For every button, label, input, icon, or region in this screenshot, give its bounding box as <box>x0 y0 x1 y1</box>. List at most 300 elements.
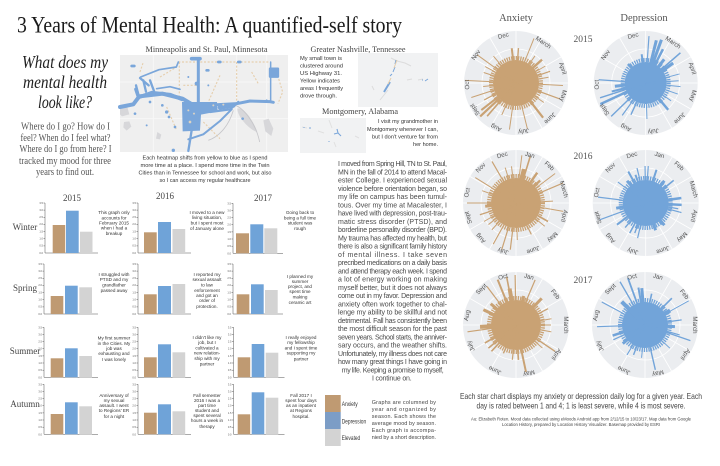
bar chart: Winter 2015: 1.0 <box>39 236 44 240</box>
star chart: Depression 2016: Aug <box>604 231 617 244</box>
note: Spring 2017: spent time <box>289 289 311 294</box>
note: Autumn 2016: 2016 I was a <box>194 398 220 403</box>
bar chart: Summer 2015: 3.5 <box>38 325 43 329</box>
star chart: Anxiety 2016: Nov <box>475 161 488 174</box>
note: Winter 2016: but I spent most <box>191 220 224 225</box>
bar chart: Summer 2017: 0.0 <box>228 375 232 379</box>
star chart: Depression 2015: March <box>664 35 682 51</box>
heading: Montgomery map: Montgomery, Alabama <box>322 107 398 116</box>
bar chart: Autumn 2016: 1.5 <box>132 411 137 415</box>
personal story paragraph: sary occurs, and the weather shifts. <box>338 343 447 350</box>
legend <box>325 395 366 446</box>
bar chart: Winter 2017: 3.0 <box>227 208 232 212</box>
question heading: What does my <box>22 52 108 72</box>
star chart: Depression 2016: Nov <box>604 161 618 174</box>
bar chart: Autumn 2015: 2.5 <box>38 396 43 400</box>
Nashville text: clustered around <box>300 64 343 70</box>
note: Autumn 2017: as an inpatient <box>286 403 317 408</box>
bar chart: Autumn 2017: 0.0 <box>228 432 232 436</box>
note: Autumn 2016: spent several <box>193 413 221 418</box>
bar chart: Winter 2017: 0.5 <box>227 244 232 248</box>
note: Autumn 2017: spent four days <box>285 398 317 403</box>
star chart: Depression 2015: Dec <box>627 31 639 41</box>
star chart: Anxiety 2017: Feb <box>549 288 561 301</box>
note: Spring 2016: sexual assault <box>192 277 222 282</box>
note: Autumn 2015: my sexual <box>104 398 124 403</box>
note: Spring 2015: passed away <box>101 288 128 293</box>
note: Winter 2017: student was <box>288 220 313 225</box>
bar chart: Winter 2015: 2.0 <box>39 222 44 226</box>
bar chart: Summer 2015: 2.0 <box>38 346 43 350</box>
star chart: Depression 2016: March <box>688 180 699 199</box>
personal story paragraph: Unfortunately, my illness does not care <box>338 351 447 358</box>
star chart: Anxiety 2016 <box>463 150 569 256</box>
star chart: Depression 2016: Sept <box>593 210 604 225</box>
star chart: Depression 2017: April <box>679 347 692 361</box>
legend: Depression <box>342 420 366 426</box>
credits: Location History, prepared by Location History Visualizer. Basemap provided by ESRI <box>502 422 660 428</box>
legend explanation: season. Each shows the <box>372 414 436 420</box>
personal story paragraph: precribed medications on a daily basis <box>338 260 448 267</box>
note: Winter 2016: I moved to a new <box>190 210 225 215</box>
bar chart: Autumn 2015: 0.5 <box>38 425 43 429</box>
star chart: Depression 2017: Feb <box>678 288 690 301</box>
bar chart: Spring 2016: 2.5 <box>132 276 137 280</box>
bar chart: Summer 2016: 3.5 <box>132 325 137 329</box>
star chart heading: Depression: Depression <box>620 13 668 24</box>
bar chart: Summer 2017: 3.5 <box>228 325 232 329</box>
star chart: Anxiety 2017: June <box>487 364 503 376</box>
note: Spring 2015: grandfather <box>102 282 126 287</box>
bar chart: Summer 2017: 3.0 <box>228 332 232 336</box>
bar chart: Autumn 2015: 3.0 <box>38 389 43 393</box>
Montgomery text: but I don't venture far from <box>372 134 438 140</box>
note: Spring 2017: project, and <box>288 284 312 289</box>
personal story paragraph: a lot of energy working on making <box>338 277 447 284</box>
bar chart: Summer 2016: 0.0 <box>132 375 137 379</box>
bar chart: Spring 2017: 3.0 <box>227 269 232 273</box>
bar chart: Summer 2016: 2.0 <box>132 346 137 350</box>
season row labels: Autumn <box>10 399 40 409</box>
personal story paragraph: I moved from Spring Hill, TN to St. Paul, <box>338 161 447 168</box>
legend explanation: nied by a short description. <box>372 435 436 441</box>
bar chart: Spring 2015: 1.5 <box>38 290 43 294</box>
star chart: Depression 2016: May <box>675 230 688 244</box>
star chart: Depression 2016: Dec <box>626 151 638 160</box>
heading: Minneapolis map: Minneapolis and St. Paul, Minnesota <box>146 45 268 54</box>
star chart: Anxiety 2015: Aug <box>489 122 503 133</box>
bar chart: Autumn 2016: 3.5 <box>132 382 137 386</box>
star chart: Anxiety 2015: Nov <box>470 48 483 62</box>
bar chart: Spring 2016: 3.5 <box>132 262 137 266</box>
bar chart: Winter 2016: 2.0 <box>132 222 137 226</box>
bar chart: Winter 2015: 2.5 <box>39 215 44 219</box>
bar chart: Autumn 2016: 0.5 <box>132 425 137 429</box>
bar chart: Summer 2015: 0.0 <box>38 375 43 379</box>
bar chart: Spring 2016: 2.0 <box>132 283 137 287</box>
personal story paragraph: anxiety often work together to chal- <box>338 301 448 308</box>
note: Spring 2016: and got an <box>196 293 218 298</box>
bar chart: Summer 2015: 1.5 <box>38 354 43 358</box>
bar chart: Winter 2015: 1.5 <box>39 230 44 234</box>
star chart: Depression 2015: Aug <box>619 122 632 133</box>
bar chart: Spring 2016 <box>132 262 191 316</box>
note: Autumn 2016: hours a week in <box>191 418 224 423</box>
star chart: Anxiety 2016: March <box>558 180 569 199</box>
star chart: Depression 2015: June <box>672 111 687 125</box>
note: Spring 2015: PTSD and my <box>100 277 129 282</box>
star chart: Depression 2015: July <box>646 127 659 135</box>
map: Minneapolis and St. Paul heatmap <box>120 55 288 152</box>
star chart: Depression 2016: June <box>655 244 670 255</box>
bar chart: Spring 2015: 1.0 <box>38 298 43 302</box>
star chart: Depression 2015: May <box>687 89 697 103</box>
intro text: Where do I go? How do I <box>21 122 110 132</box>
note: Summer 2017: my fellowship <box>287 340 315 345</box>
star chart: Anxiety 2017: Jan <box>523 273 535 282</box>
note: Winter 2017: being a full time <box>284 215 317 220</box>
star chart: Anxiety 2016: Dec <box>496 151 509 160</box>
star chart: Depression 2017 <box>592 272 698 378</box>
intro text: tracked my mood for three <box>19 156 111 167</box>
note: Winter 2015: when I had a <box>101 226 128 230</box>
note: Spring 2017: summer <box>292 279 309 284</box>
bar chart: Winter 2015: 3.0 <box>39 208 44 212</box>
personal story paragraph: lenge my ability to be skillful and not <box>338 310 447 317</box>
bar chart: Autumn 2016: 2.0 <box>132 403 137 407</box>
star chart: Anxiety 2015 <box>464 31 568 135</box>
legend explanation: Each graph is accompa- <box>372 428 436 434</box>
personal story paragraph: my life. Keeping a promise to myself, <box>342 368 444 374</box>
bar chart: Summer 2016 <box>132 325 191 379</box>
star chart: Depression 2016: Oct <box>593 187 602 198</box>
personal story paragraph: tous. Over my time at Macalester, I <box>338 202 447 209</box>
bar chart column headers: 2017 <box>254 193 272 203</box>
star chart: Anxiety 2017 <box>463 272 569 378</box>
bar chart: Spring 2017: 2.0 <box>227 283 232 287</box>
bar chart: Spring 2017: 0.0 <box>227 312 232 316</box>
legend: Elevated <box>342 436 360 442</box>
Montgomery text: Montgomery whenever I can, <box>367 127 438 133</box>
star chart: Anxiety 2017: Oct <box>498 272 509 282</box>
heading: Nashville map: Greater Nashville, Tennessee <box>310 45 406 54</box>
legend: Anxiety <box>342 402 358 408</box>
star chart: Anxiety 2016: June <box>525 244 540 255</box>
star chart: Anxiety 2016: May <box>545 230 559 244</box>
bar chart: Summer 2015: 0.5 <box>38 368 43 372</box>
title: 3 Years of Mental Health: A quantified-self story <box>17 12 402 38</box>
bar chart: Winter 2017: 1.5 <box>227 230 232 234</box>
star chart: Depression 2017: Jan <box>652 273 664 282</box>
bar chart: Autumn 2017 <box>228 382 284 436</box>
Nashville text: Yellow indicates <box>300 78 340 84</box>
personal story paragraph: how many great things I have going in <box>338 359 447 366</box>
note: Spring 2015: I struggled with <box>99 272 130 277</box>
bar chart: Spring 2015: 2.5 <box>38 276 43 280</box>
note: Autumn 2016: Fall semester <box>193 393 221 398</box>
star chart: Anxiety 2016: July <box>496 246 509 256</box>
Montgomery text: I visit my grandmother in <box>378 119 438 125</box>
note: Spring 2017: making <box>293 294 308 300</box>
bar chart: Spring 2015: 2.0 <box>38 283 43 287</box>
star chart: Depression 2016 <box>593 150 699 256</box>
note: Summer 2017: partner <box>294 357 309 362</box>
year label 2015: 2015 <box>574 35 593 45</box>
note: Summer 2017: and I spent time <box>285 345 318 350</box>
note: Autumn 2016: therapy <box>199 424 215 429</box>
personal story paragraph: the most difficult season for the past <box>338 326 447 333</box>
intro text: years to find out. <box>36 167 94 178</box>
star chart: Anxiety 2015: Oct <box>464 79 471 90</box>
bar chart: Winter 2016 <box>132 201 191 255</box>
star chart: Depression 2015: Sept <box>598 102 611 117</box>
legend explanation: Graphs are columned by <box>372 400 436 406</box>
Nashville text: areas I frequently <box>300 86 343 92</box>
note: Autumn 2017: Fall 2017 I <box>290 393 312 398</box>
note: Autumn 2017: at Regions <box>290 408 313 413</box>
bar chart: Spring 2017: 3.5 <box>227 262 232 266</box>
star chart: Depression 2017: July <box>594 339 606 352</box>
bar chart: Summer 2015: 3.0 <box>38 332 43 336</box>
bar chart: Autumn 2017: 1.5 <box>228 411 232 415</box>
star chart: Depression 2016: April <box>689 209 698 223</box>
bar chart: Autumn 2017: 2.0 <box>228 403 232 407</box>
bar chart: Summer 2015 <box>38 325 98 379</box>
bar chart: Autumn 2016: 2.5 <box>132 396 137 400</box>
bar chart: Autumn 2017: 3.0 <box>228 389 232 393</box>
Nashville text: US Highway 31. <box>300 71 342 77</box>
bar chart: Winter 2017: 0.0 <box>227 251 232 255</box>
legend explanation: year and organized by <box>372 407 436 413</box>
star chart: Depression 2016: July <box>626 246 639 256</box>
personal story paragraph: of mental illness. I take seven <box>338 252 447 259</box>
bar chart: Autumn 2016: 3.0 <box>132 389 137 393</box>
note: Summer 2017: supporting my <box>287 351 316 356</box>
bar chart: Summer 2016: 1.0 <box>132 361 137 365</box>
star chart: Anxiety 2017: Aug <box>463 309 472 322</box>
bar chart: Autumn 2016: 0.0 <box>132 432 137 436</box>
bar chart: Autumn 2015: 1.5 <box>38 411 43 415</box>
map: Montgomery heatmap <box>300 118 366 153</box>
personal story paragraph: there is also a significant family history <box>338 244 448 251</box>
map caption: so I can access my regular healthcare <box>160 178 250 184</box>
bar chart: Spring 2015: 3.0 <box>38 269 43 273</box>
bar chart: Spring 2017: 1.5 <box>227 290 232 294</box>
bar chart: Spring 2017: 1.0 <box>227 298 232 302</box>
bar chart: Summer 2017: 0.5 <box>228 368 232 372</box>
bar chart: Spring 2017 <box>227 262 283 316</box>
star chart: Depression 2016: Feb <box>673 160 686 173</box>
bar chart: Winter 2015: 3.5 <box>39 201 44 205</box>
bar chart: Spring 2017: 0.5 <box>227 304 232 308</box>
bar chart: Winter 2017: 1.0 <box>227 237 232 241</box>
star chart: Depression 2015 <box>594 31 698 135</box>
bar chart: Autumn 2015: 1.0 <box>38 418 43 422</box>
bar chart: Summer 2015: 2.5 <box>38 339 43 343</box>
map: Nashville heatmap <box>358 53 438 107</box>
note: Spring 2016: protection. <box>196 304 218 309</box>
Montgomery text: her home. <box>413 142 438 148</box>
bar chart: Autumn 2017: 1.0 <box>228 418 232 422</box>
bar chart: Winter 2016: 0.5 <box>132 244 137 248</box>
star chart: Anxiety 2017: Sept <box>475 282 489 296</box>
note: Summer 2016: job, but I <box>197 340 216 345</box>
personal story paragraph: My trauma has affected my health, but <box>338 235 447 242</box>
personal story paragraph: come out in my favor. Depression and <box>338 293 447 300</box>
note: Spring 2016: I reported my <box>193 272 221 277</box>
bar chart: Summer 2017: 2.0 <box>228 346 232 350</box>
star chart: Anxiety 2016: Jan <box>524 151 536 160</box>
star chart: Anxiety 2015: Sept <box>469 102 482 117</box>
star chart: Anxiety 2017: July <box>465 339 477 352</box>
bar chart column headers: 2016 <box>156 191 174 201</box>
note: Summer 2016: new relation- <box>194 351 221 356</box>
question heading: look like? <box>38 92 92 112</box>
star chart: Anxiety 2015: April <box>557 61 567 75</box>
star chart: Anxiety 2016: Aug <box>474 231 487 244</box>
star chart: Anxiety 2015: July <box>517 127 530 135</box>
season row labels: Spring <box>13 283 37 293</box>
note: Winter 2015: accounts for <box>101 215 127 220</box>
note: Autumn 2016: student and <box>195 408 219 413</box>
bar chart: Autumn 2016 <box>132 382 191 436</box>
personal story paragraph: and attend therapy each week. I spend <box>338 268 447 275</box>
bar chart: Spring 2016: 1.5 <box>132 290 137 294</box>
bar chart: Spring 2015: 3.5 <box>38 262 43 266</box>
bar chart: Winter 2016: 0.0 <box>132 251 137 255</box>
star chart: Depression 2017: Oct <box>627 272 638 282</box>
bar chart: Spring 2016: 1.0 <box>132 298 137 302</box>
bar chart: Summer 2017 <box>228 325 284 379</box>
season row labels: Summer <box>10 346 40 356</box>
bar chart: Winter 2015: 0.5 <box>39 244 44 248</box>
star chart: Anxiety 2016: Oct <box>463 187 472 198</box>
note: Autumn 2015: assault. I went <box>99 403 129 408</box>
year label 2016: 2016 <box>574 152 593 162</box>
star chart: Depression 2015: April <box>687 61 697 75</box>
note: Autumn 2017: hospital. <box>292 414 310 419</box>
intro text: feel? When do I feel what? <box>20 133 111 144</box>
note: Summer 2016: ship with my <box>194 356 220 361</box>
credits: Au: Elizabeth Roten. Mood data collected using eMoods Android app from 2/12/15 to 10/23/17. Map data from Google <box>471 417 691 423</box>
bar chart: Summer 2015: 1.0 <box>38 361 43 365</box>
bar chart: Autumn 2015 <box>38 382 98 436</box>
star chart: Anxiety 2016: Sept <box>463 210 474 225</box>
note: Summer 2015: job was <box>105 346 122 351</box>
bar chart: Winter 2016: 1.5 <box>132 230 137 234</box>
legend explanation: average mood by season. <box>372 421 436 427</box>
note: Summer 2015: exhausting and <box>98 351 130 356</box>
star chart: Depression 2015: Nov <box>600 48 613 62</box>
bar chart: Summer 2017: 1.5 <box>228 354 232 358</box>
star chart: Anxiety 2015: Dec <box>497 31 510 41</box>
star chart: Anxiety 2017: May <box>521 368 535 378</box>
map caption: more time at a place. I spend more time in the Twin <box>140 163 270 169</box>
star chart: Anxiety 2015: June <box>542 111 557 125</box>
bar chart: Summer 2016: 3.0 <box>132 332 137 336</box>
note: Summer 2015: My first summer <box>98 336 131 340</box>
Nashville text: drove through. <box>300 94 337 100</box>
personal story paragraph: borderline personality disorder (BPD). <box>338 227 447 234</box>
personal story paragraph: MN in the fall of 2014 to attend Macal- <box>338 169 448 176</box>
Nashville text: My small town is <box>300 56 342 62</box>
star chart: Depression 2017: Sept <box>604 282 618 296</box>
star chart heading: Anxiety: Anxiety <box>499 13 534 24</box>
year label 2017: 2017 <box>574 276 593 286</box>
bar chart: Winter 2017: 3.5 <box>227 201 232 205</box>
bar chart: Summer 2017: 2.5 <box>228 339 232 343</box>
star chart: Depression 2017: May <box>650 368 664 378</box>
personal story paragraph: myself better, but it does not always <box>338 285 448 292</box>
bar chart: Winter 2016: 1.0 <box>132 236 137 240</box>
note: Summer 2016: I didn't like my <box>193 335 222 340</box>
bar chart: Autumn 2017: 3.5 <box>228 382 232 386</box>
note: Summer 2015: I was lonely <box>102 357 127 362</box>
bar chart: Spring 2015: 0.5 <box>38 304 43 308</box>
bar chart: Summer 2016: 0.5 <box>132 368 137 372</box>
bar chart: Autumn 2015: 0.0 <box>38 432 43 436</box>
bar chart: Spring 2015 <box>38 262 98 316</box>
note: Autumn 2015: Anniversary of <box>99 393 129 398</box>
star chart: Depression 2017: March <box>691 316 698 334</box>
star chart: Anxiety 2015: May <box>558 89 568 103</box>
personal story paragraph: ester College. I experienced sexual <box>338 178 447 184</box>
personal story paragraph: I continue on. <box>372 376 412 383</box>
star chart: Anxiety 2016: Feb <box>543 160 556 173</box>
note: Autumn 2015: to Regions' ER <box>99 408 130 413</box>
note: Winter 2015: February 2015 <box>99 220 129 225</box>
bar chart: Spring 2015: 0.0 <box>38 312 43 316</box>
note: Winter 2016: of January alone <box>190 226 224 231</box>
bar chart: Summer 2017: 1.0 <box>228 361 232 365</box>
note: Spring 2017: I planned my <box>287 274 314 279</box>
star chart: Depression 2017: June <box>616 364 632 376</box>
star chart: Depression 2016: Jan <box>654 151 666 160</box>
note: Spring 2016: to law <box>201 282 214 287</box>
bar chart: Winter 2015: 0.0 <box>39 251 44 255</box>
note: Winter 2017: rough <box>294 226 306 231</box>
star chart: Anxiety 2017: April <box>550 347 563 361</box>
note: Winter 2017: Going back to <box>286 210 315 215</box>
star chart: Anxiety 2017: March <box>562 316 569 334</box>
bar chart: Autumn 2015: 2.0 <box>38 403 43 407</box>
personal story paragraph: have lived with depression, post-trau- <box>338 211 448 218</box>
bar chart: Spring 2016: 0.0 <box>132 312 137 316</box>
personal story paragraph: violence before orientation began, so <box>338 186 447 193</box>
bar chart: Spring 2016: 3.0 <box>132 269 137 273</box>
bar chart: Winter 2017: 2.5 <box>227 215 232 219</box>
note: Summer 2016: cultivated a <box>195 345 219 350</box>
note: Winter 2015: breakup <box>106 231 123 236</box>
note: Spring 2017: ceramic art <box>289 300 312 305</box>
note: Summer 2017: I really enjoyed <box>286 335 317 340</box>
star chart: Depression 2017: Aug <box>592 309 601 322</box>
note: Spring 2016: order of <box>199 298 216 303</box>
bar chart column headers: 2015 <box>63 193 82 203</box>
question heading: mental health <box>23 72 107 92</box>
note: Winter 2016: living situation, <box>192 215 222 220</box>
note: Summer 2016: partner <box>200 361 215 366</box>
bar chart: Autumn 2016: 1.0 <box>132 418 137 422</box>
personal story paragraph: matic stress disorder (PTSD), and <box>338 219 447 226</box>
bar chart: Summer 2016: 1.5 <box>132 354 137 358</box>
bar chart: Winter 2017 <box>227 201 283 255</box>
bar chart: Winter 2015 <box>39 201 98 255</box>
bar chart: Autumn 2015: 3.5 <box>38 382 43 386</box>
bar chart: Autumn 2017: 0.5 <box>228 425 232 429</box>
star chart: Anxiety 2016: April <box>559 209 569 223</box>
bar chart: Winter 2016: 2.5 <box>132 215 137 219</box>
